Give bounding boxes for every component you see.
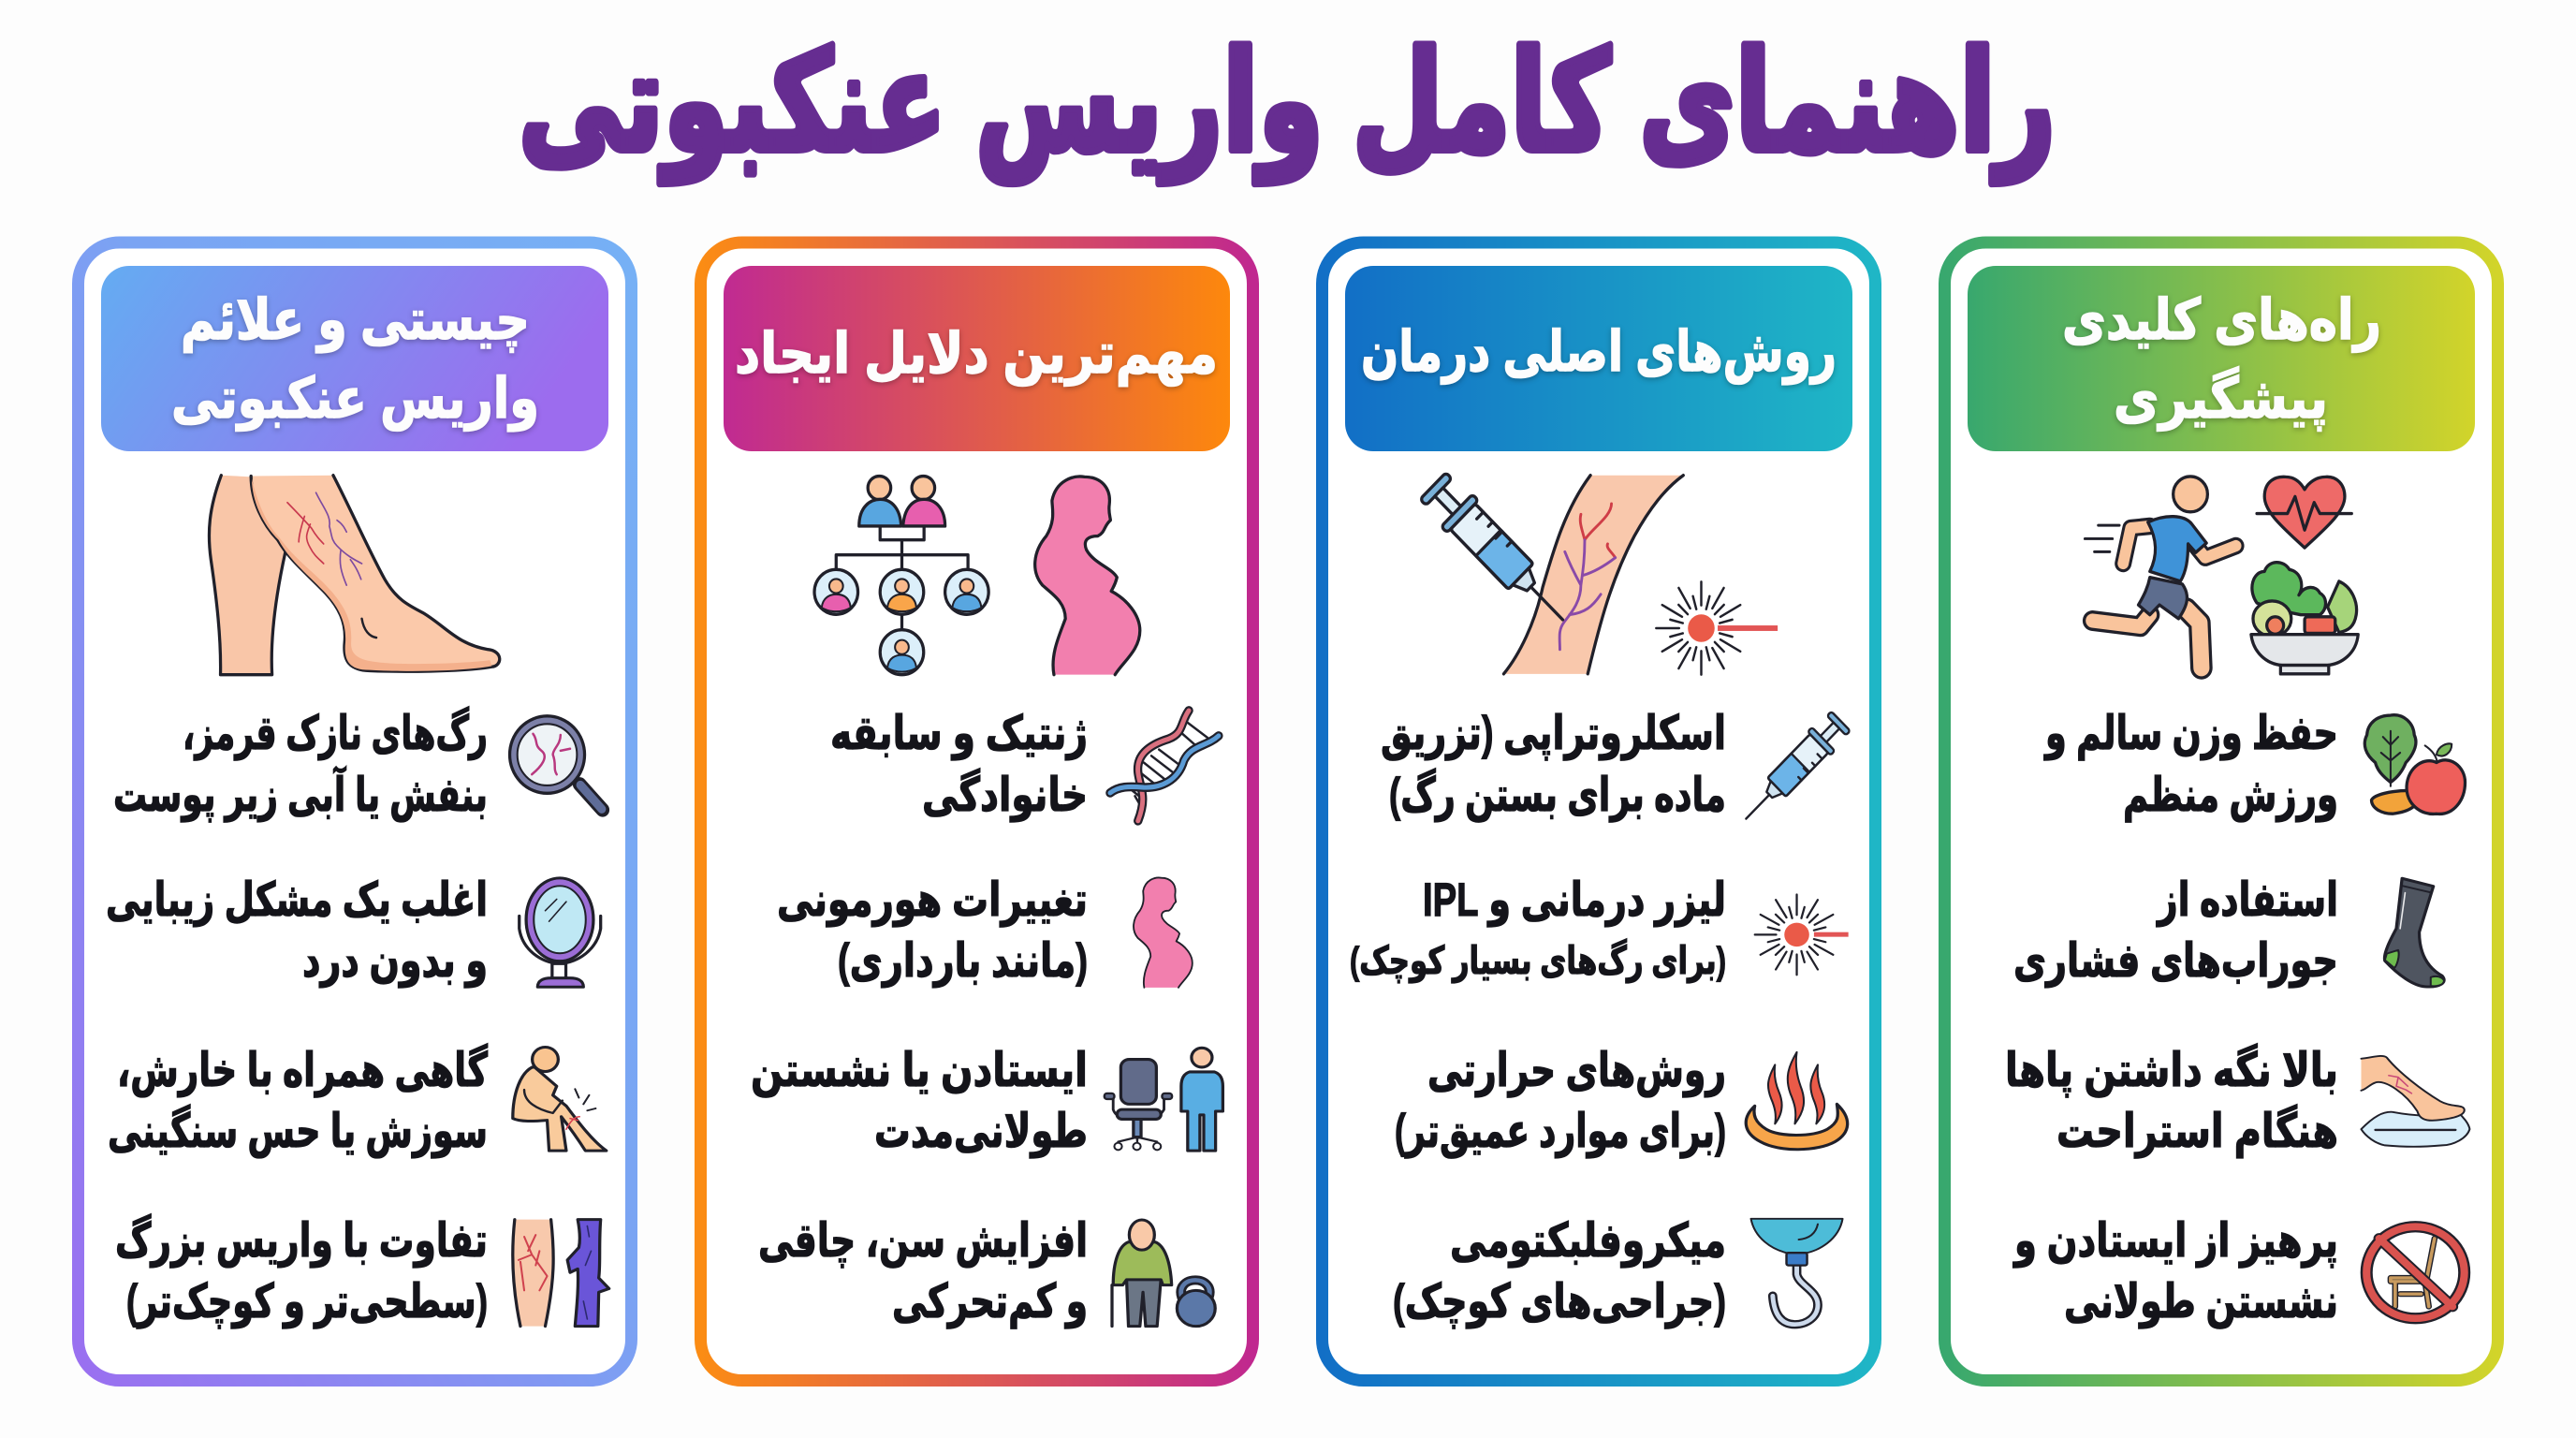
text: ماده برای بستن رگ)	[1389, 768, 1726, 823]
text	[1395, 1044, 1726, 1159]
panel: what and symptoms	[79, 242, 631, 1380]
item: microphlebectomy	[1393, 1214, 1843, 1329]
text: لیزر درمانی و IPL	[1423, 873, 1726, 928]
heading: causes	[724, 266, 1230, 451]
text: اسکلروتراپی (تزریق	[1381, 707, 1726, 761]
icon: heat	[1746, 1052, 1848, 1150]
item: thermal methods	[1395, 1044, 1848, 1159]
text: میکروفلبکتومی	[1450, 1214, 1726, 1269]
icon: magnifier	[510, 716, 603, 810]
text: و کم‌تحرکی	[892, 1275, 1088, 1329]
item: laser	[1350, 873, 1849, 984]
panel: treatments	[1322, 242, 1876, 1380]
item: itching	[108, 1043, 607, 1159]
panel: causes	[700, 242, 1252, 1380]
icon: laser	[1755, 894, 1849, 975]
text: حفظ وزن سالم و	[2043, 707, 2338, 761]
icon: surgical hook	[1751, 1219, 1843, 1325]
text	[1381, 707, 1726, 823]
item: genetics	[830, 707, 1219, 823]
text: جوراب‌های فشاری	[2013, 934, 2338, 989]
icon: DNA	[1110, 711, 1219, 821]
icon: leaf and apple	[2364, 715, 2466, 814]
text: پرهیز از ایستادن و	[2012, 1214, 2338, 1269]
icon: office chair and standing man	[1105, 1048, 1222, 1151]
text: تغییرات هورمونی	[777, 873, 1088, 928]
heading: prevention	[1968, 266, 2475, 451]
text: سوزش یا حس سنگینی	[108, 1104, 488, 1159]
text: رگ‌های نازک قرمز،	[183, 706, 488, 761]
icon: spider vs varicose veins	[513, 1220, 609, 1327]
text	[2043, 707, 2338, 823]
text	[1350, 873, 1726, 984]
text	[113, 706, 488, 823]
text: گاهی همراه با خارش،	[117, 1043, 489, 1098]
text	[106, 873, 488, 989]
text: ورزش منظم	[2123, 769, 2338, 823]
text: افزایش سن، چاقی	[758, 1214, 1088, 1269]
text: (برای رگ‌های بسیار کوچک)	[1350, 939, 1726, 984]
item: age and obesity	[758, 1214, 1215, 1329]
item: hormones	[777, 873, 1193, 988]
item: elevate legs	[2005, 1043, 2469, 1159]
text: طولانی‌مدت	[874, 1105, 1088, 1159]
item: difference with varicose	[115, 1213, 609, 1329]
title: راهنمای کامل واریس عنکبوتی	[519, 25, 2056, 184]
icon: pregnant silhouette	[1134, 877, 1193, 988]
text	[2012, 1214, 2338, 1329]
text: (جراحی‌های کوچک)	[1393, 1275, 1726, 1329]
icon: no chair	[2366, 1226, 2465, 1318]
icon: mirror	[520, 878, 601, 987]
illustration: runner, heart and salad	[2085, 477, 2358, 674]
text: روش‌های حرارتی	[1427, 1044, 1726, 1098]
text: تفاوت با واریس بزرگ	[115, 1213, 488, 1269]
text	[777, 873, 1088, 988]
text: بنفش یا آبی زیر پوست	[113, 766, 488, 823]
text: اغلب یک مشکل زیبایی	[106, 873, 488, 927]
text: (برای موارد عمیق‌تر)	[1395, 1105, 1726, 1159]
item: thin veins	[113, 706, 603, 823]
text	[830, 707, 1088, 823]
item: cosmetic problem	[106, 873, 601, 989]
heading: what and symptoms: واریس عنکبوتی	[171, 367, 539, 432]
item: avoid prolonged sitting	[2012, 1214, 2465, 1329]
text	[2005, 1043, 2338, 1159]
illustration: family tree and pregnancy	[814, 477, 1140, 675]
text	[2013, 873, 2338, 989]
panel: prevention	[1945, 242, 2497, 1380]
heading: prevention: راه‌های کلیدی	[2062, 288, 2381, 353]
item: sclerotherapy	[1381, 707, 1852, 830]
heading: causes: مهم‌ترین دلایل ایجاد	[735, 322, 1218, 387]
text: استفاده از	[2156, 873, 2338, 927]
icon: sock	[2384, 878, 2444, 987]
illustration: legs with spider veins	[209, 476, 500, 675]
item: compression socks	[2013, 873, 2444, 989]
heading: prevention: پیشگیری	[2114, 366, 2328, 432]
text	[108, 1043, 489, 1159]
item: prolonged standing or sitting	[751, 1044, 1222, 1159]
text: (سطحی‌تر و کوچک‌تر)	[126, 1275, 488, 1329]
icon: leg on pillow	[2361, 1056, 2469, 1147]
text	[758, 1214, 1088, 1329]
item: healthy weight	[2043, 707, 2466, 823]
illustration: syringe, leg and laser	[1417, 470, 1778, 675]
heading: treatments: روش‌های اصلی درمان	[1361, 320, 1837, 385]
text	[751, 1044, 1088, 1159]
text: هنگام استراحت	[2056, 1104, 2338, 1159]
text: ایستادن یا نشستن	[751, 1044, 1088, 1098]
text: بالا نگه داشتن پاها	[2005, 1043, 2338, 1098]
text: نشستن طولانی	[2064, 1275, 2338, 1329]
text: خانوادگی	[922, 768, 1088, 823]
heading: what and symptoms: چیستی و علائم	[181, 288, 530, 353]
text: (مانند بارداری)	[838, 934, 1088, 988]
icon: syringe	[1734, 710, 1852, 830]
text: ژنتیک و سابقه	[830, 707, 1088, 761]
text	[115, 1213, 488, 1329]
text: و بدون درد	[302, 934, 488, 989]
text	[1393, 1214, 1726, 1329]
icon: sitting person with itchy leg	[513, 1048, 607, 1151]
heading: what and symptoms	[101, 266, 608, 451]
heading: treatments	[1345, 266, 1852, 451]
icon: elderly man and kettlebell	[1112, 1220, 1215, 1327]
